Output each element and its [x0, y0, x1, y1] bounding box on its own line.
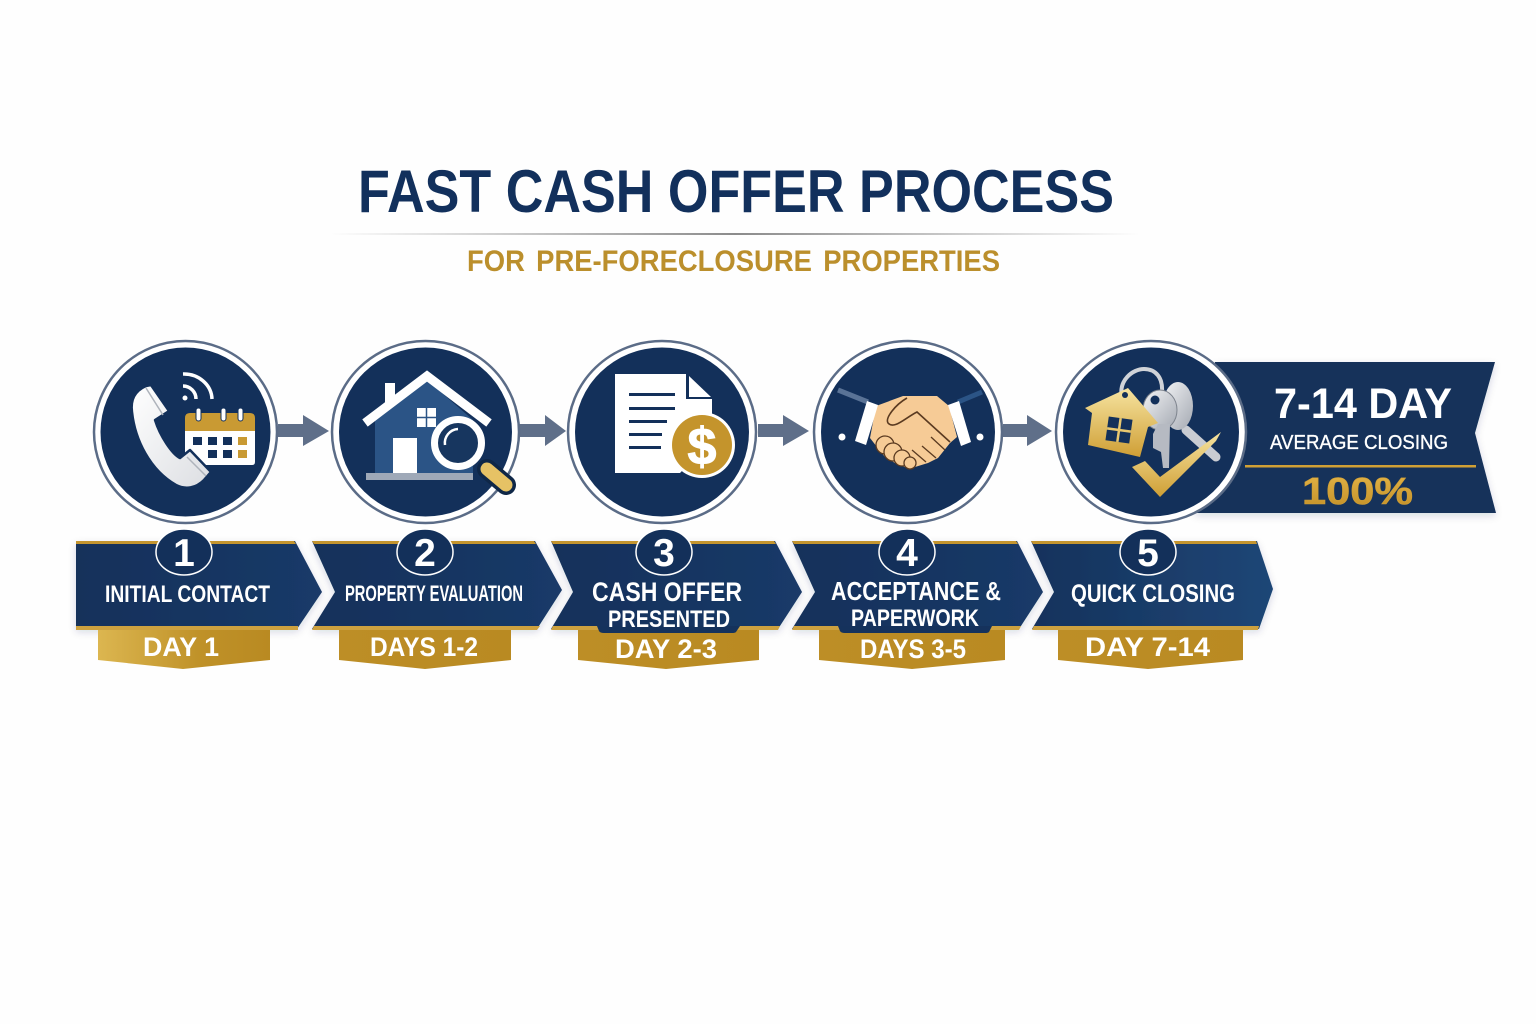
step 2 day tag [339, 630, 511, 669]
key ring [1121, 369, 1162, 398]
hands [870, 396, 957, 468]
step 3 label: CASH OFFER [592, 577, 742, 607]
step 5 number: 5 [1137, 532, 1159, 575]
magnifier [434, 420, 506, 485]
step 5 number [1120, 529, 1176, 575]
step 4 icon: handshake [814, 341, 1002, 523]
calendar [185, 408, 255, 465]
house tag [1085, 388, 1158, 457]
callout percentage: 100% [1302, 471, 1413, 513]
step 1 day tag [98, 630, 270, 669]
step 4 number: 4 [896, 532, 918, 575]
sleeves and cuffs [838, 390, 868, 402]
step 2 number: 2 [414, 532, 436, 575]
step 4 number [879, 529, 935, 575]
step 2 label: PROPERTY EVALUATION [345, 581, 523, 606]
dollar coin: $ [688, 418, 717, 476]
step 1 ribbon [76, 529, 322, 669]
subtitle: FOR PRE-FORECLOSURE PROPERTIES [467, 245, 1000, 278]
step 2 ribbon [312, 529, 562, 669]
callout headline: 7-14 DAY [1274, 380, 1452, 428]
step 2 number [397, 529, 453, 575]
dollar coin [669, 412, 735, 478]
back key [1163, 382, 1216, 457]
step 1 number [156, 529, 212, 575]
step 4 ribbon [792, 529, 1043, 669]
phone handset [132, 385, 211, 488]
step 3 number: 3 [653, 532, 675, 575]
step 2 day tag: DAYS 1-2 [370, 632, 478, 662]
step 3 icon: document and dollar coin [568, 341, 756, 523]
callout: average closing banner [1195, 362, 1496, 513]
step 3 number [636, 529, 692, 575]
house body [375, 380, 473, 473]
step 3 day tag [578, 626, 759, 669]
arrow 1 to 2 [278, 415, 329, 446]
step 4 label: PAPERWORK [851, 605, 980, 632]
arrow 4 to 5 [1003, 415, 1052, 446]
step 3 label: PRESENTED [608, 606, 730, 633]
step 1 number: 1 [173, 532, 195, 575]
step 5 label: QUICK CLOSING [1071, 580, 1235, 608]
step 4 day tag [819, 626, 1005, 669]
step 1 label: INITIAL CONTACT [105, 581, 270, 608]
callout label: AVERAGE CLOSING [1270, 432, 1448, 454]
step 4 day tag: DAYS 3-5 [860, 634, 966, 664]
step 3 ribbon [551, 529, 802, 669]
signal waves [182, 374, 212, 400]
arrow 3 to 4 [758, 415, 809, 446]
arrow 2 to 3 [518, 415, 566, 446]
step 5 day tag: DAY 7-14 [1085, 632, 1210, 662]
front key [1143, 390, 1177, 468]
title: FAST CASH OFFER PROCESS [358, 158, 1114, 225]
step 3 label [592, 577, 742, 633]
step 5 ribbon [1031, 529, 1273, 669]
step 4 label: ACCEPTANCE & [831, 576, 1001, 606]
step 1 icon: phone and calendar [94, 341, 277, 523]
step 2 icon: house with magnifier [332, 341, 519, 523]
check mark [1132, 432, 1221, 497]
step 1 day tag: DAY 1 [143, 632, 219, 662]
step 5 day tag [1058, 630, 1243, 669]
step 4 label [831, 576, 1001, 632]
step 3 day tag: DAY 2-3 [615, 634, 717, 664]
document [615, 374, 712, 473]
step 5 icon: keys, house tag and check [1056, 341, 1246, 523]
